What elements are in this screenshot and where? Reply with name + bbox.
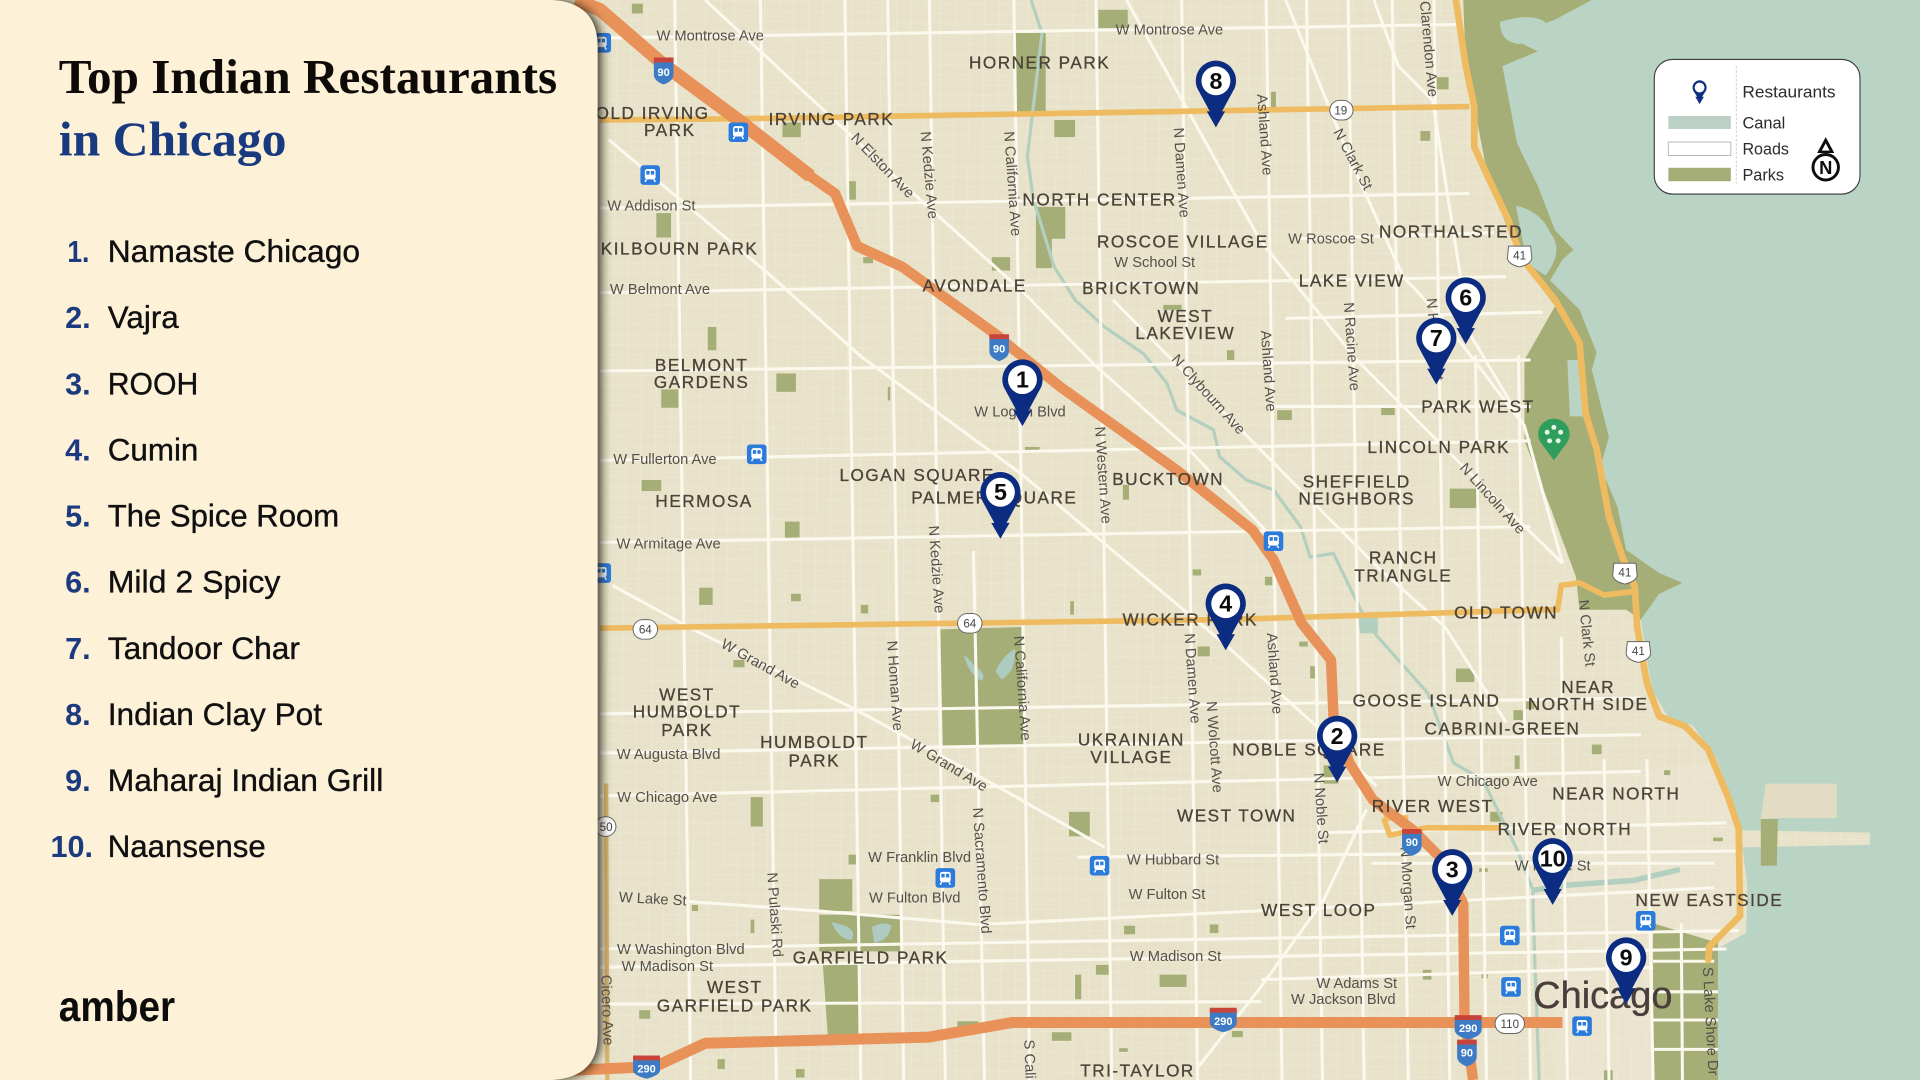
neighbourhood labels: [596, 53, 1783, 1080]
street labels: W Madison St: [622, 959, 713, 975]
pin 7: [1416, 318, 1456, 384]
pier and harbour land: [1761, 784, 1837, 819]
list item 1: 1.: [67, 235, 89, 269]
pin 4: [1206, 583, 1246, 650]
neighbourhood labels: PALMER SQUARE: [911, 487, 1077, 507]
street labels: W Montrose Ave: [1116, 22, 1223, 38]
street labels: N Elston Ave: [847, 130, 917, 202]
list item 1: Namaste Chicago: [108, 233, 360, 269]
legend swatch: canal: [1668, 116, 1731, 129]
list item 9: 9.: [65, 764, 91, 798]
pin 1: 1: [1016, 367, 1029, 393]
pin 8: [1196, 61, 1236, 127]
street labels: W Addison St: [607, 199, 696, 215]
neighbourhood labels: LAKE VIEW: [1299, 271, 1405, 291]
small parks: [632, 4, 1723, 1080]
street labels: [607, 0, 1721, 1079]
legend: [1654, 59, 1860, 194]
neighbourhood labels: OLD TOWN: [1454, 602, 1558, 622]
pin 8: 8: [1209, 68, 1222, 94]
neighbourhood labels: NEW EASTSIDE: [1635, 890, 1783, 910]
restaurant list: [50, 233, 383, 864]
street labels: W Armitage Ave: [616, 537, 721, 553]
neighbourhood labels: PARK WEST: [1421, 397, 1535, 417]
street labels: W Augusta Blvd: [617, 747, 720, 763]
interstate shields: 290: [637, 1064, 656, 1076]
neighbourhood labels: NORTH CENTER: [1023, 190, 1177, 210]
icon: north arrow: [1813, 137, 1838, 180]
street labels: N Clark St: [1575, 599, 1597, 667]
list item 4: [65, 431, 198, 467]
street labels: W Montrose Ave: [656, 28, 764, 44]
street label: Cicero Ave: Cicero Ave: [597, 975, 616, 1046]
lake inlets over parks: [1500, 17, 1586, 416]
list item 10: 10.: [50, 830, 93, 864]
interstate shields: [633, 58, 1482, 1079]
pin 3: 3: [1446, 856, 1459, 882]
interstate shields: 90: [658, 67, 670, 79]
street labels: N Western Ave: [1091, 426, 1114, 524]
I-90 wider northern section: [576, 0, 811, 176]
lakeshore drive: [1456, 0, 1740, 960]
neighbourhood labels: GARFIELD PARK: [657, 995, 813, 1015]
street labels: W Jackson Blvd: [1291, 992, 1396, 1008]
neighbourhood labels: WEST LOOP: [1261, 900, 1376, 920]
pin 7: 7: [1430, 325, 1443, 351]
list item 5: 5.: [65, 500, 91, 534]
neighbourhood labels: RANCH: [1369, 547, 1438, 567]
neighbourhood labels: CABRINI-GREEN: [1424, 719, 1580, 739]
neighbourhood labels: LOGAN SQUARE: [839, 465, 995, 485]
pin 1: [1002, 359, 1043, 426]
neighbourhood labels: WEST: [707, 977, 762, 997]
neighbourhood labels: ROSCOE VILLAGE: [1097, 231, 1269, 251]
route shields: [595, 100, 1651, 1033]
pin 10: [1533, 838, 1573, 905]
icon: green park marker: [1538, 419, 1570, 460]
neighbourhood labels: UKRAINIAN: [1078, 730, 1185, 750]
street labels: W Lake St: [618, 890, 687, 909]
street labels: N Pulaski Rd: [763, 872, 785, 958]
street labels: N Halsted St: [1423, 297, 1446, 381]
street labels: N Clark St: [1329, 126, 1375, 193]
title: Top Indian Restaurants: [59, 49, 557, 104]
list item 5: The Spice Room: [108, 498, 339, 534]
street labels: W Grand Ave: [907, 737, 990, 795]
I-90 highway: [576, 0, 1473, 1080]
neighbourhood labels: WEST: [1158, 306, 1213, 326]
neighbourhood labels: BELMONT: [655, 355, 748, 375]
pin 5: 5: [994, 479, 1007, 505]
icon: north arrow: N: [1819, 157, 1832, 178]
interstate shields: 290: [1214, 1016, 1232, 1028]
neighbourhood labels: GOOSE ISLAND: [1353, 691, 1500, 711]
neighbourhood labels: TRI-TAYLOR: [1080, 1060, 1195, 1080]
street labels: W Franklin Blvd: [868, 850, 971, 866]
street labels: N California Ave: [1010, 635, 1033, 741]
icon: legend pin: [1693, 80, 1707, 104]
neighbourhood labels: TRIANGLE: [1354, 566, 1452, 586]
street labels: N Kedzie Ave: [917, 131, 940, 220]
neighbourhood labels: BRICKTOWN: [1082, 278, 1200, 298]
pin 9: 9: [1620, 945, 1633, 971]
I-290 highway: [573, 1022, 1562, 1070]
neighbourhood labels: HERMOSA: [655, 491, 753, 511]
street labels: W Hubbard St: [1127, 852, 1219, 868]
neighbourhood labels: Chicago: [1533, 975, 1672, 1017]
major road grid: [600, 0, 1739, 1080]
pin 5: [980, 472, 1021, 539]
street labels: N Kedzie Ave: [925, 525, 947, 614]
pin 3: [1432, 849, 1472, 916]
list item 3: 3.: [65, 367, 91, 401]
neighbourhood labels: NEAR: [1561, 677, 1615, 697]
neighbourhood labels: LAKEVIEW: [1135, 323, 1235, 343]
list item 8: 8.: [65, 698, 91, 732]
interstate shields: 90: [993, 344, 1005, 356]
list item 8: Indian Clay Pot: [108, 696, 322, 732]
pin 2: [1317, 716, 1357, 782]
street labels: W Roscoe St: [1288, 232, 1374, 248]
street labels: N Racine Ave: [1340, 302, 1362, 391]
route shields: 110: [1501, 1018, 1520, 1031]
pin 2: 2: [1331, 723, 1344, 749]
list item 6: 6.: [65, 566, 91, 600]
street labels: W Grand Ave: [718, 636, 802, 693]
street labels: W Fulton Blvd: [869, 890, 960, 906]
street labels: W Washington Blvd: [617, 942, 745, 958]
legend: canal: Canal: [1742, 113, 1785, 132]
list item 2: 2.: [65, 301, 91, 335]
neighbourhood labels: AVONDALE: [923, 275, 1027, 295]
list item 3: ROOH: [108, 365, 198, 401]
street labels: W Logan Blvd: [974, 404, 1066, 420]
list item 10: Naansense: [108, 828, 266, 864]
street labels: S Lake Shore Dr: [1699, 967, 1721, 1076]
route shields: 64: [639, 624, 652, 637]
neighbourhood labels: NORTHALSTED: [1379, 222, 1523, 242]
interstate shields: 290: [1459, 1023, 1477, 1035]
neighbourhood labels: PARK: [789, 751, 840, 771]
interstate shields: 90: [1461, 1048, 1473, 1060]
street labels: S Cali: [1020, 1039, 1038, 1079]
pin 6: [1446, 277, 1486, 344]
list item 7: Tandoor Char: [108, 630, 300, 666]
list item 2: Vajra: [108, 299, 179, 335]
route shields: 64: [963, 618, 977, 631]
neighbourhood labels: BUCKTOWN: [1112, 469, 1224, 489]
neighbourhood labels: NOBLE SQUARE: [1232, 740, 1386, 760]
title: [59, 49, 557, 167]
street labels: N Homan Ave: [883, 640, 905, 731]
lakefront parks: [819, 0, 1778, 1080]
neighbourhood labels: SHEFFIELD: [1303, 471, 1411, 491]
street labels: W Belmont Ave: [610, 282, 710, 298]
route shields: 50: [600, 821, 613, 834]
legend: restaurants: Restaurants: [1742, 82, 1836, 101]
street labels: W Madison St: [1130, 949, 1221, 965]
pin 10: 10: [1540, 845, 1566, 871]
street labels: N Damen Ave: [1170, 127, 1192, 218]
street labels: W Kinzie St: [1515, 859, 1591, 875]
pin 4: 4: [1219, 591, 1232, 617]
street labels: W Adams St: [1316, 976, 1397, 992]
list item 6: Mild 2 Spicy: [108, 564, 280, 600]
neighbourhood labels: PARK: [644, 120, 696, 140]
neighbourhood labels: WEST: [659, 684, 715, 704]
street labels: N Clybourn Ave: [1168, 352, 1248, 438]
neighbourhood labels: HUMBOLDT: [633, 702, 741, 722]
ponds in parks: [831, 649, 1015, 943]
neighbourhood labels: PARK: [661, 720, 713, 740]
neighbourhood labels: LINCOLN PARK: [1367, 437, 1510, 457]
street labels: W Fulton St: [1129, 887, 1205, 903]
neighbourhood labels: OLD IRVING: [596, 103, 710, 123]
pin 6: 6: [1459, 285, 1472, 311]
street labels: W Chicago Ave: [617, 790, 717, 806]
neighbourhood labels: GARDENS: [654, 372, 749, 392]
list item 4: 4.: [65, 433, 91, 467]
neighbourhood labels: HORNER PARK: [969, 53, 1110, 73]
street labels: N Lincoln Ave: [1456, 460, 1528, 538]
street labels: N Morgan St: [1396, 846, 1418, 930]
transit station icons: [591, 33, 1656, 1036]
list item 2: [65, 299, 179, 335]
panel: restaurant list background: [0, 0, 598, 1080]
neighbourhood labels: RIVER WEST: [1372, 796, 1494, 816]
neighbourhood labels: VILLAGE: [1090, 747, 1172, 767]
street labels: Clarendon Ave: [1416, 0, 1440, 98]
neighbourhood labels: WEST TOWN: [1177, 806, 1296, 826]
street labels: Ashland Ave: [1257, 330, 1278, 412]
neighbourhood labels: RIVER NORTH: [1498, 819, 1632, 839]
legend swatch: roads: [1668, 142, 1731, 156]
logo: amber: amber: [59, 983, 175, 1031]
neighbourhood labels: NEAR NORTH: [1552, 784, 1680, 804]
lake water: [1502, 0, 1920, 1080]
street labels: N California Ave: [1000, 131, 1023, 237]
street labels: W Fullerton Ave: [613, 452, 717, 468]
arterial yellow roads: [600, 107, 1635, 1080]
list item 3: [65, 365, 198, 401]
street labels: Ashland Ave: [1263, 632, 1285, 715]
neighbourhood labels: IRVING PARK: [769, 109, 894, 129]
neighbourhood labels: GARFIELD PARK: [793, 948, 948, 968]
street labels: N Damen Ave: [1181, 633, 1203, 724]
neighbourhood labels: WICKER PARK: [1122, 610, 1258, 630]
pin 9: [1606, 937, 1646, 1004]
list item 9: Maharaj Indian Grill: [108, 762, 383, 798]
title: in Chicago: [59, 112, 287, 167]
neighbourhood labels: HUMBOLDT: [760, 732, 868, 752]
street labels: N Sacramento Blvd: [969, 807, 994, 934]
neighbourhood labels: NORTH SIDE: [1528, 694, 1648, 714]
street labels: N Wolcott Ave: [1203, 701, 1225, 793]
river: [1027, 0, 1680, 1080]
street labels: N Noble St: [1310, 772, 1331, 844]
route shields: 19: [1334, 104, 1347, 117]
route shields: 41: [1513, 250, 1526, 263]
list item 7: 7.: [65, 632, 91, 666]
legend: parks: Parks: [1742, 165, 1784, 184]
neighbourhood labels: KILBOURN PARK: [601, 239, 758, 259]
list item 4: Cumin: [108, 431, 198, 467]
route shields: 41: [1632, 645, 1645, 658]
interstate highways: [573, 0, 1562, 1080]
street labels: Ashland Ave: [1253, 94, 1275, 176]
street labels: W School St: [1114, 255, 1195, 271]
legend swatch: parks: [1668, 168, 1731, 181]
legend: roads: Roads: [1742, 140, 1789, 159]
neighbourhood labels: NEIGHBORS: [1298, 488, 1415, 508]
interstate shields: 90: [1406, 837, 1418, 849]
street labels: W Chicago Ave: [1438, 774, 1538, 790]
route shields: 41: [1618, 567, 1631, 580]
